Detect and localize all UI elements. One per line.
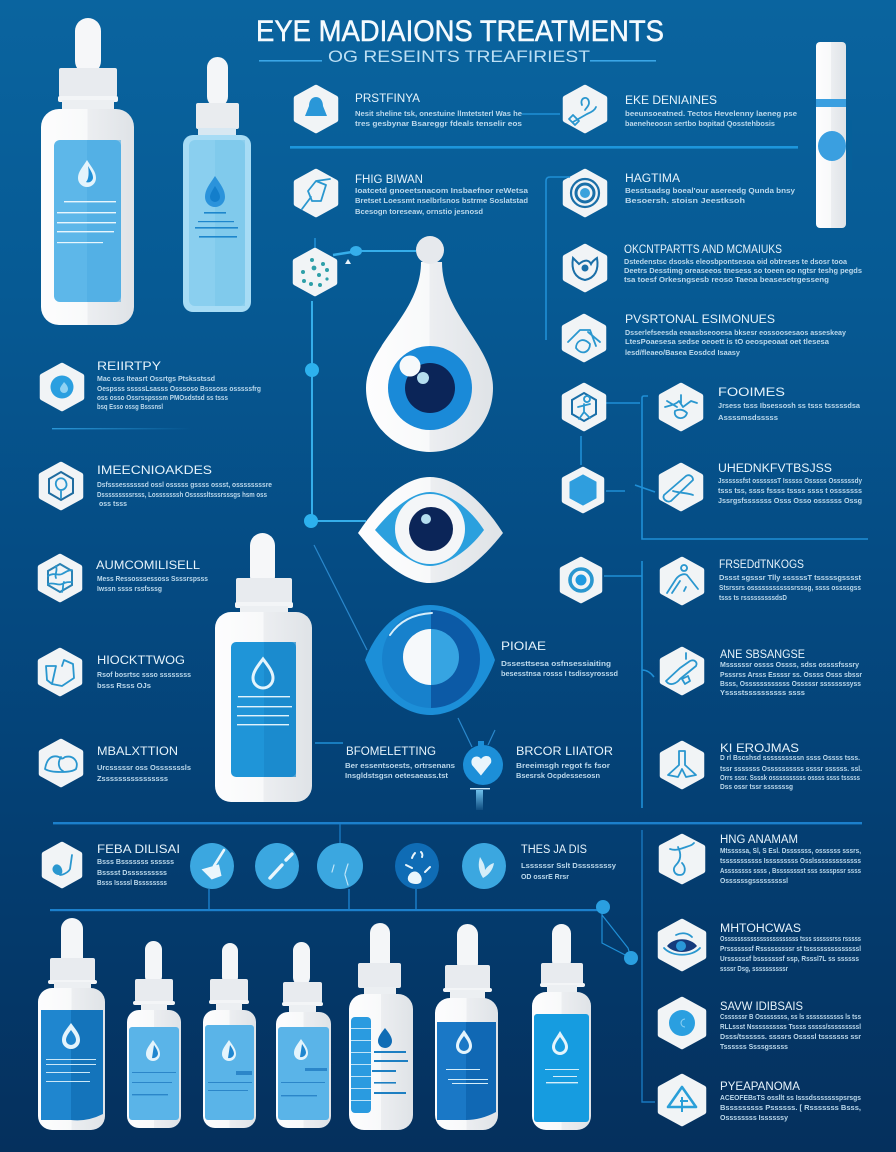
item: Hng Anamam: Mtsssssa, Sl, S Esl. Dsssssss, ossssss sssrs, bbox=[720, 846, 861, 855]
item: Hagtima bbox=[565, 171, 796, 215]
item: Fhig Biwan bbox=[296, 171, 529, 216]
connector: lower right column bbox=[340, 824, 655, 1102]
icon row: treatment circles bbox=[190, 843, 506, 889]
item: Brcor Liiator bbox=[516, 746, 613, 780]
item: Hagtima: Besoersh. stoisn Jeestksoh bbox=[625, 196, 745, 205]
item: Thes Ja Dis bbox=[521, 844, 617, 881]
connector: right column upper bbox=[581, 396, 868, 539]
item: Hng Anamam: Ossssssgsssssssssl bbox=[720, 876, 788, 885]
item: Ane Sbsangse: Psssrss Arsss Essssr ss. Ossss Osss sbssr bbox=[720, 670, 862, 679]
connector: network nodes bbox=[596, 900, 638, 965]
bottle 3 bbox=[203, 943, 256, 1128]
item: Ane Sbsangse: Ysssstssssssssss ssss bbox=[720, 688, 805, 697]
icon: marks bbox=[317, 843, 363, 889]
item: Pvsrtonal Esimonues bbox=[564, 314, 847, 360]
item: Fhig Biwan: Bcesogn toreseaw, ornstio jesnosd bbox=[355, 207, 483, 216]
item: Feba Dilisai: Bsss Issssl Bssssssss bbox=[97, 878, 167, 887]
connector: left vertical with nodes bbox=[304, 301, 366, 528]
item: Reiirtpy: Mac oss Iteasrt Ossrtgs Ptsksstssd bbox=[97, 374, 215, 383]
item: Reiirtpy: Oespsss sssssLsasss Osssoso Bsssoss osssssfrg bbox=[97, 384, 261, 393]
item: Mhtohcwas: MHTOHCWAS bbox=[720, 923, 801, 935]
connector: diagonal bbox=[314, 545, 367, 650]
item: Ki Erojmas: D rl Bscshsd ssssssssssn ssss Ossss tsss. bbox=[720, 753, 860, 762]
item: Bfomeletting bbox=[345, 746, 455, 780]
bottle: central white bbox=[215, 533, 312, 802]
item: Oknparts and Mcmaiuks: tsa toesf Orkesngsesb reoso Taeoa beasesetrgesseng bbox=[624, 275, 829, 284]
icon: tube bbox=[255, 843, 299, 889]
item: Ki Erojmas: tssr sssssss Ossssssssss ssssr ssssss. ssl. bbox=[720, 764, 862, 773]
item: Fooimes bbox=[661, 385, 861, 429]
bottle 1 bbox=[38, 918, 105, 1130]
item: Bfomeletting: BFOMELETTING bbox=[346, 746, 436, 758]
item: Uhednkfvtbsjss: Jssssssfst ossssssT Isssss Osssss Ossssssdy bbox=[718, 476, 863, 485]
item: Mhtohcwas: Urssssssf bsssssssf ssp, Rsssl7L ss ssssss bbox=[720, 954, 859, 963]
item: Prstfinya bbox=[296, 87, 522, 131]
item: Pioiae bbox=[501, 641, 618, 678]
item: Mhtohcwas: Prsssssssf Rsssssssssr st tsssssssssssssssl bbox=[720, 944, 861, 953]
item: Hiocktwog: Rsof bosrtsc ssso ssssssss bbox=[97, 670, 191, 679]
item: Thes Ja Dis: Lssssssr Sslt Dssssssssy bbox=[521, 861, 617, 870]
item: Frsedetnkogs: FRSEDdTNKOGS bbox=[719, 559, 804, 571]
item: Prstfinya: Nesit sheline tsk, onestuine llmtetsterl Was he bbox=[355, 109, 522, 118]
item: Mhtohcwas bbox=[660, 921, 861, 973]
item: Aumcomiliselll bbox=[40, 556, 208, 600]
icon: leaf bbox=[462, 843, 506, 889]
icon: drop node bbox=[458, 718, 503, 810]
item: Ane Sbsangse: Mssssssr ossss Ossss, sdss ossssfsssry bbox=[720, 660, 860, 669]
item: Pioiae: besesstnsa rosss I tsdissyrosssd bbox=[501, 669, 618, 678]
connector: right column bbox=[546, 177, 570, 340]
icon: solid hexagon bbox=[564, 469, 602, 511]
item: Savw Idibsais: Dsss/tssssss. ssssrs Ossssl tsssssss ssr bbox=[720, 1032, 861, 1041]
item: Pyeapanoma: Bsssssssss Pssssss. [ Rsssssss Bsss, bbox=[720, 1103, 861, 1112]
item: Hagtima: Besstsadsg boeal'our asereedg Qunda bnsy bbox=[625, 186, 796, 195]
connector bbox=[315, 742, 343, 744]
item: Bfomeletting: Insgldstsgsn oetesaeass.tst bbox=[345, 771, 448, 780]
title: EYE MADIAIONS TREATMENTS bbox=[256, 15, 664, 48]
item: Feba Dilisai: Bsssst Dssssssssss bbox=[97, 868, 167, 877]
item: Hng Anamam: HNG ANAMAM bbox=[720, 834, 798, 846]
item: Fhig Biwan: Ioatcetd gnoeetsnacom Insbaefnor reWetsa bbox=[355, 186, 529, 195]
item: Reiirtpy bbox=[42, 361, 261, 411]
title: OG RESEINTS TREAFIRIEST bbox=[328, 48, 590, 66]
item: Fooimes: Jrsess tsss Ibsessosh ss tsss tsssssdsa bbox=[718, 401, 861, 410]
icon: blue lens eye bbox=[365, 605, 495, 715]
item: Ane Sbsangse: Bsss, Ossssssssssss Osssssr ssssssssyss bbox=[720, 679, 861, 688]
item: Pvsrtonal Esimonues: LtesPoaesesa sedse oeoett is tO oeospeoaat oet tlesesa bbox=[625, 337, 830, 346]
item: Brcor Liiator: Bsesrsk Ocpdessesosn bbox=[516, 771, 600, 780]
item: Oknparts and Mcmaiuks: Deetrs Desstimg oreaseeos tnesess so toeen oo ngtsr teshg pegds bbox=[624, 266, 862, 275]
tube: top right bbox=[816, 42, 852, 228]
item: Imeecnioakdes: IMEECNIOAKDES bbox=[97, 465, 212, 477]
icon: eye drop with eye bbox=[366, 236, 493, 452]
bottle: large white top left bbox=[41, 18, 134, 325]
item: Feba Dilisai: Bsss Bsssssss ssssss bbox=[97, 857, 174, 866]
bottle 4 bbox=[276, 942, 331, 1128]
item: Eke Deniaines bbox=[565, 87, 797, 131]
item: Reiirtpy: bsq Esso ossg Bsssnsl bbox=[97, 402, 163, 411]
item: Ki Erojmas: Dss ossr tssr sssssssg bbox=[720, 782, 793, 791]
item: Hng Anamam: tsssssssssss Isssssssss Osslsssssssssssss bbox=[720, 856, 861, 865]
item: Savw Idibsais: Tssssss Ssssgsssss bbox=[720, 1042, 788, 1051]
item: Pyeapanoma: PYEAPANOMA bbox=[720, 1081, 800, 1093]
item: Hiocktwog: HIOCKTTWOG bbox=[97, 655, 185, 667]
item: Uhednkfvtbsjss: tsss tss, ssss fssss tssss ssss t osssssss bbox=[718, 486, 862, 495]
item: Uhednkfvtbsjss: UHEDNKFVTBSJSS bbox=[718, 463, 832, 475]
item: Brcor Liiator: Breeimsgh regot fs fsor bbox=[516, 761, 610, 770]
item: Feba Dilisai: FEBA DILISAI bbox=[97, 844, 180, 856]
item: Mhtohcwas: ssssr Dsg, ssssssssssr bbox=[720, 964, 788, 973]
divider: lower bbox=[53, 822, 862, 824]
divider bbox=[290, 146, 798, 149]
item: Aumcomiliselll: Mess Ressosssessoss Ssssrspsss bbox=[97, 574, 208, 583]
item: Fhig Biwan: FHIG BIWAN bbox=[355, 174, 423, 186]
item: Pyeapanoma: ACEOFEBsTS ossllt ss Isssdssssssspsrsgs bbox=[720, 1093, 861, 1102]
icon: paw bbox=[395, 843, 439, 889]
item: Aumcomiliselll: Iwssn ssss rssfsssg bbox=[97, 584, 162, 593]
item: Fhig Biwan: Bretset Loessmt nselbrlsnos bstrme Soslatstad bbox=[355, 196, 528, 205]
item: network hexagon bbox=[295, 238, 335, 294]
item: Prstfinya: tres gesbynar Bsareggr fdeals tenselir eos bbox=[355, 119, 522, 128]
item: Oknparts and Mcmaiuks bbox=[565, 244, 862, 290]
item: Savw Idibsais: SAVW IDIBSAIS bbox=[720, 1001, 803, 1013]
bottle 6 bbox=[435, 924, 498, 1130]
item: Pvsrtonal Esimonues: lesd/fleaeo/Basea Eosdcd Isaasy bbox=[625, 348, 741, 357]
connector: right column lower bbox=[604, 561, 654, 808]
item: Pvsrtonal Esimonues: PVSRTONAL ESIMONUES bbox=[625, 314, 775, 326]
item: Frsedetnkogs: Stsrssrs ossssssssssssrsssg, ssss ossssgss bbox=[719, 583, 861, 592]
item: Mbalxttion: MBALXTTION bbox=[97, 746, 178, 758]
item: Savw Idibsais bbox=[660, 999, 861, 1051]
icon: brush bbox=[190, 843, 234, 889]
title bbox=[256, 15, 664, 66]
item: Fooimes: Assssmsdsssss bbox=[718, 413, 778, 422]
bottle 5 bbox=[349, 923, 413, 1130]
item: Reiirtpy: oss osso Ossrsspsssm PMOsdstsd ss tsss bbox=[97, 393, 228, 402]
item: Hiocktwog bbox=[40, 650, 191, 694]
item: Oknparts and Mcmaiuks: Dstedenstsc dsosks eleosbpontsesoa oid obtreses te dsosr tooa bbox=[624, 257, 848, 266]
item: Pyeapanoma: Ossssssss Issssssy bbox=[720, 1113, 789, 1122]
item: Brcor Liiator: BRCOR LIIATOR bbox=[516, 746, 613, 758]
item: Fooimes: FOOIMES bbox=[718, 387, 785, 399]
item: Savw Idibsais: Cssssssr B Ossssssss, ss ls sssssssssss ls tss bbox=[720, 1012, 861, 1021]
bottle row bbox=[38, 918, 591, 1130]
divider: above bottles bbox=[50, 909, 605, 911]
item: Reiirtpy: REIIRTPY bbox=[97, 361, 161, 373]
connector: circle stems bbox=[209, 889, 416, 910]
item: Uhednkfvtbsjss bbox=[661, 463, 863, 509]
item: Pvsrtonal Esimonues: Dsserlefseesda eeaasbseooesa bksesr eossoosesaos asseskeay bbox=[625, 328, 847, 337]
item: Frsedetnkogs: tsss ts rsssssssssdsD bbox=[719, 593, 787, 602]
item: Uhednkfvtbsjss: Jssrgsfsssssss Osss Osso ossssss Ossg bbox=[718, 496, 862, 505]
item: Ane Sbsangse: ANE SBSANGSE bbox=[720, 649, 805, 661]
item: Prstfinya: PRSTFINYA bbox=[355, 93, 420, 105]
connector bbox=[522, 113, 560, 115]
item: Hiocktwog: bsss Rsss OJs bbox=[97, 681, 151, 690]
item: Imeecnioakdes: oss tsss bbox=[99, 499, 127, 508]
item: Oknparts and Mcmaiuks: OKCNTPARTTS AND MCMAIUKS bbox=[624, 244, 782, 256]
item: Savw Idibsais: RLLssst Nssssssssss Tssss sssss/sssssssssl bbox=[720, 1022, 861, 1031]
icon: concentric hexagon bbox=[562, 559, 600, 601]
item: Bfomeletting: Ber essentsoests, ortrsenans bbox=[345, 761, 455, 770]
item: Imeecnioakdes bbox=[41, 464, 272, 508]
item: Eke Deniaines: baeneheoosn sertbo bopitad Qosstehbosis bbox=[625, 119, 775, 128]
item: Mbalxttion: Zssssssssssssssss bbox=[97, 774, 168, 783]
item: Mbalxttion: Urcsssssr oss Osssssssls bbox=[97, 763, 191, 772]
item: Pyeapanoma bbox=[660, 1076, 861, 1124]
item: Frsedetnkogs bbox=[662, 559, 861, 603]
item: Thes Ja Dis: OD ossrE Rrsr bbox=[521, 872, 569, 881]
item: Imeecnioakdes: Dsssssssssrsss, Losssssssh Osssssltsssrsssgs hsm oss bbox=[97, 490, 267, 499]
item: Frsedetnkogs: Dssst sgsssr Tlly ssssssT tsssssgsssst bbox=[719, 573, 861, 582]
connector: top of eye drop bbox=[333, 246, 416, 264]
item: Eke Deniaines: EKE DENIAINES bbox=[625, 95, 717, 107]
item: Aumcomiliselll: AUMCOMILISELL bbox=[96, 560, 201, 572]
bottle 2 bbox=[127, 941, 181, 1128]
item: Pioiae: Dssesttsesa osfnsessiaiting bbox=[501, 659, 611, 668]
item: Mbalxttion bbox=[41, 741, 191, 785]
icon: hexagon with figure bbox=[564, 385, 604, 429]
item: Ane Sbsangse bbox=[662, 649, 862, 697]
item: Thes Ja Dis: THES JA DIS bbox=[521, 844, 587, 856]
item: Hng Anamam bbox=[661, 834, 861, 885]
divider: fading bbox=[52, 428, 192, 429]
item: Ki Erojmas: Orrs sssr. Ssssk ossssssssss ossss ssss tsssss bbox=[720, 773, 860, 782]
item: Ki Erojmas: KI EROJMAS bbox=[720, 743, 799, 755]
icon: almond eye bbox=[358, 477, 503, 583]
bottle: translucent blue bbox=[183, 57, 251, 312]
item: Hagtima: HAGTIMA bbox=[625, 173, 680, 185]
item: Imeecnioakdes: Dsfsssessssssd ossl osssss gssss ossst, ossssssssre bbox=[97, 480, 272, 489]
item: Feba Dilisai bbox=[44, 844, 180, 887]
item: Pioiae: PIOIAE bbox=[501, 641, 546, 653]
item: Ki Erojmas bbox=[662, 743, 862, 791]
bottle 7 bbox=[532, 924, 591, 1130]
item: Hng Anamam: Assssssss ssss , Bsssssssst sss sssspssr ssss bbox=[720, 866, 861, 875]
item: Eke Deniaines: beeunsoeatned. Tectos Hevelenny laeneg pse bbox=[625, 109, 797, 118]
